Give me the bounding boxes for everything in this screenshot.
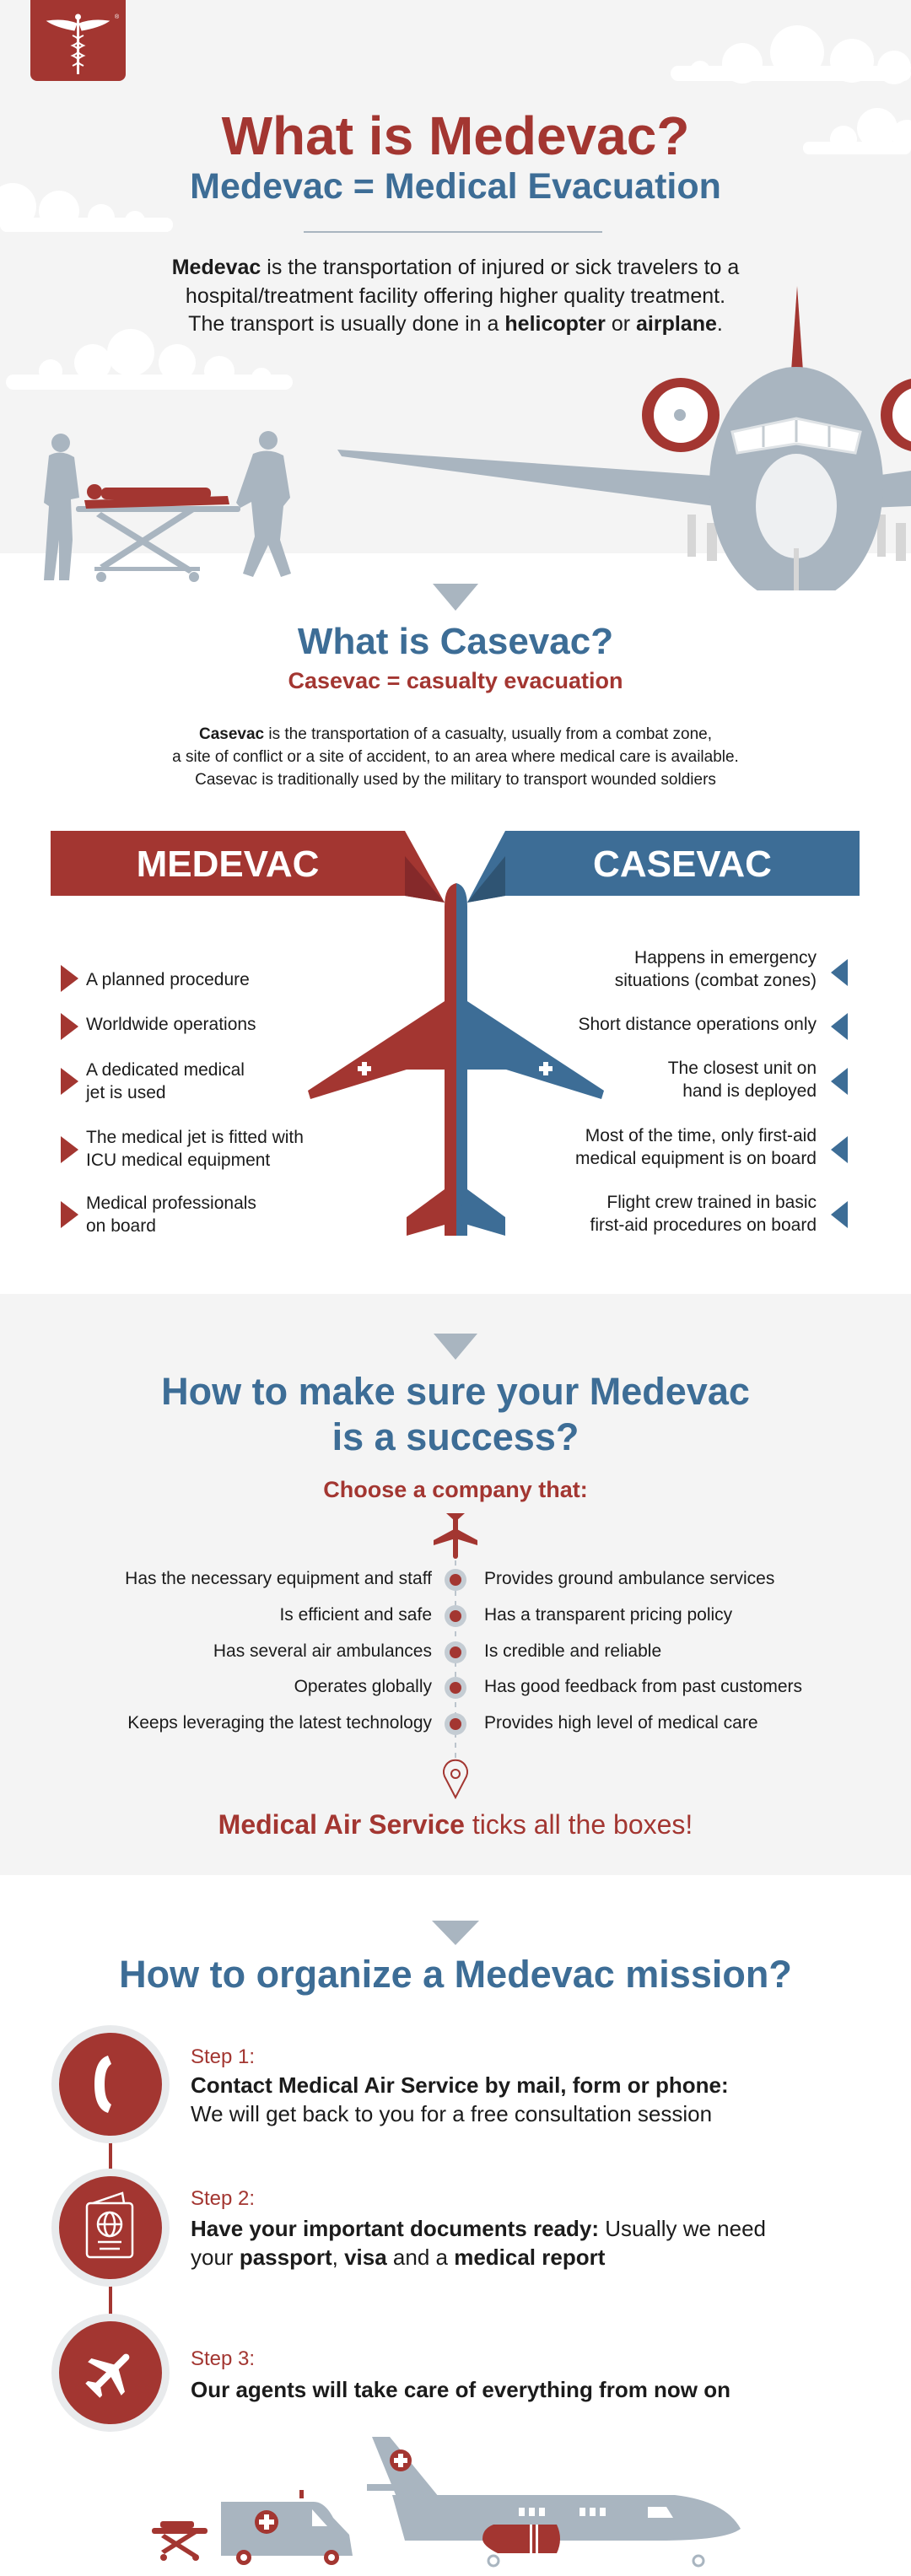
- step 3: Step 3:: [191, 2347, 255, 2370]
- intro paragraph: The transport is usually done in a helicopter or airplane.: [188, 312, 723, 336]
- icon: passport: [51, 2169, 170, 2287]
- intro paragraph: Medevac is the transportation of injured or sick travelers to a: [172, 256, 739, 279]
- casevac list: hand is deployed: [682, 1081, 817, 1101]
- icon: airplane: [51, 2314, 170, 2432]
- medevac list: on board: [86, 1216, 156, 1236]
- arrow: down 2: [434, 1334, 477, 1360]
- background: success section: [0, 1294, 911, 1875]
- medevac list: A dedicated medical: [86, 1060, 245, 1080]
- banner: medevac: [51, 831, 445, 903]
- stretcher: [152, 2521, 208, 2561]
- airplane front: [337, 286, 911, 603]
- icon: small plane: [434, 1513, 477, 1559]
- casevac list: medical equipment is on board: [575, 1149, 817, 1168]
- subtitle: Medevac = Medical Evacuation: [190, 166, 721, 207]
- background: hero: [0, 0, 911, 553]
- logo: [30, 0, 126, 81]
- plane: casevac half: [456, 883, 604, 1236]
- cloud: top right: [671, 25, 911, 84]
- step 1: Step 1:: [191, 2045, 255, 2068]
- criteria right: [484, 1569, 802, 1733]
- heading: casevac: What is Casevac?: [298, 621, 613, 662]
- criteria left: Has several air ambulances: [213, 1641, 432, 1661]
- casevac list: Short distance operations only: [578, 1015, 817, 1034]
- step 1: [191, 2045, 729, 2126]
- intro paragraph: hospital/treatment facility offering higher quality treatment.: [186, 283, 725, 307]
- step 2: Have your important documents ready: Usually we need: [191, 2216, 766, 2241]
- step 2: Step 2:: [191, 2187, 255, 2210]
- icon: phone: [51, 2025, 170, 2143]
- bottom illustration: stretcher, ambulance, jet: [152, 2437, 741, 2568]
- step 3: Our agents will take care of everything from now on: [191, 2377, 730, 2402]
- medevac list: Medical professionals: [86, 1194, 256, 1213]
- heading: success: How to make sure your Medevac: [161, 1370, 750, 1413]
- medevac list: ICU medical equipment: [86, 1151, 270, 1170]
- medevac list: The medical jet is fitted with: [86, 1128, 304, 1147]
- comparison graphic: [51, 831, 860, 1236]
- arrow: down 3: [432, 1921, 479, 1945]
- criteria right: Has a transparent pricing policy: [484, 1605, 732, 1625]
- divider: [304, 231, 602, 233]
- intro paragraph: [172, 256, 739, 336]
- timeline graphic: [434, 1513, 477, 1799]
- casevac paragraph: Casevac is the transportation of a casualty, usually from a combat zone,: [199, 725, 712, 743]
- people with stretcher: [44, 431, 291, 582]
- heading: organize: How to organize a Medevac mission?: [119, 1953, 792, 1996]
- casevac list: Happens in emergency: [634, 948, 817, 967]
- heading: success: is a success?: [332, 1415, 579, 1458]
- cloud: lower left: [6, 329, 293, 390]
- step 2: your passport, visa and a medical report: [191, 2245, 605, 2270]
- arrow: down 1: [433, 584, 478, 611]
- casevac list: situations (combat zones): [615, 971, 817, 990]
- subheading: casevac: Casevac = casualty evacuation: [288, 668, 623, 693]
- casevac list: Most of the time, only first-aid: [585, 1126, 817, 1145]
- medevac list: jet is used: [86, 1083, 166, 1102]
- banner: casevac: [467, 831, 860, 903]
- casevac list: first-aid procedures on board: [590, 1215, 817, 1235]
- criteria right: Provides ground ambulance services: [484, 1569, 774, 1588]
- casevac paragraph: [172, 725, 739, 789]
- markers: left: [61, 965, 78, 1228]
- ambulance: [221, 2490, 353, 2565]
- criteria left: Operates globally: [294, 1677, 432, 1696]
- step 1: Contact Medical Air Service by mail, form or phone:: [191, 2072, 729, 2098]
- markers: right: [831, 959, 848, 1228]
- steps graphic: [51, 2025, 170, 2432]
- criteria left: Is efficient and safe: [279, 1605, 432, 1625]
- banner text: casevac: CASEVAC: [593, 843, 772, 885]
- criteria left: Keeps leveraging the latest technology: [127, 1713, 432, 1733]
- logo: ®: [115, 13, 120, 20]
- casevac list: [575, 948, 817, 1235]
- step 1: We will get back to you for a free consultation session: [191, 2101, 712, 2126]
- step 2: [191, 2187, 766, 2270]
- casevac paragraph: Casevac is traditionally used by the military to transport wounded soldiers: [195, 771, 716, 789]
- medevac list: Worldwide operations: [86, 1015, 256, 1034]
- icon: location pin: [444, 1760, 467, 1797]
- conclusion: Medical Air Service ticks all the boxes!: [218, 1809, 693, 1840]
- jet: [367, 2437, 741, 2566]
- criteria right: Provides high level of medical care: [484, 1713, 757, 1733]
- criteria right: Is credible and reliable: [484, 1641, 661, 1661]
- heading: success: [161, 1370, 750, 1458]
- plane: medevac half: [308, 883, 456, 1236]
- cloud: right: [803, 108, 911, 154]
- step 3: [191, 2347, 730, 2402]
- criteria left: Has the necessary equipment and staff: [125, 1569, 432, 1588]
- subheading: choose: Choose a company that:: [323, 1477, 588, 1502]
- casevac paragraph: a site of conflict or a site of accident, to an area where medical care is available.: [172, 748, 739, 766]
- banner text: medevac: MEDEVAC: [137, 843, 319, 885]
- hero illustration: [0, 25, 911, 590]
- criteria right: Has good feedback from past customers: [484, 1677, 802, 1696]
- casevac list: Flight crew trained in basic: [606, 1193, 817, 1212]
- cloud: left: [0, 183, 173, 232]
- criteria left: [125, 1569, 432, 1733]
- plus signs: [358, 1062, 553, 1075]
- casevac list: The closest unit on: [668, 1059, 817, 1078]
- medevac list: A planned procedure: [86, 970, 250, 989]
- title: What is Medevac?: [222, 105, 689, 166]
- dots: [445, 1569, 466, 1735]
- medevac list: [86, 970, 304, 1236]
